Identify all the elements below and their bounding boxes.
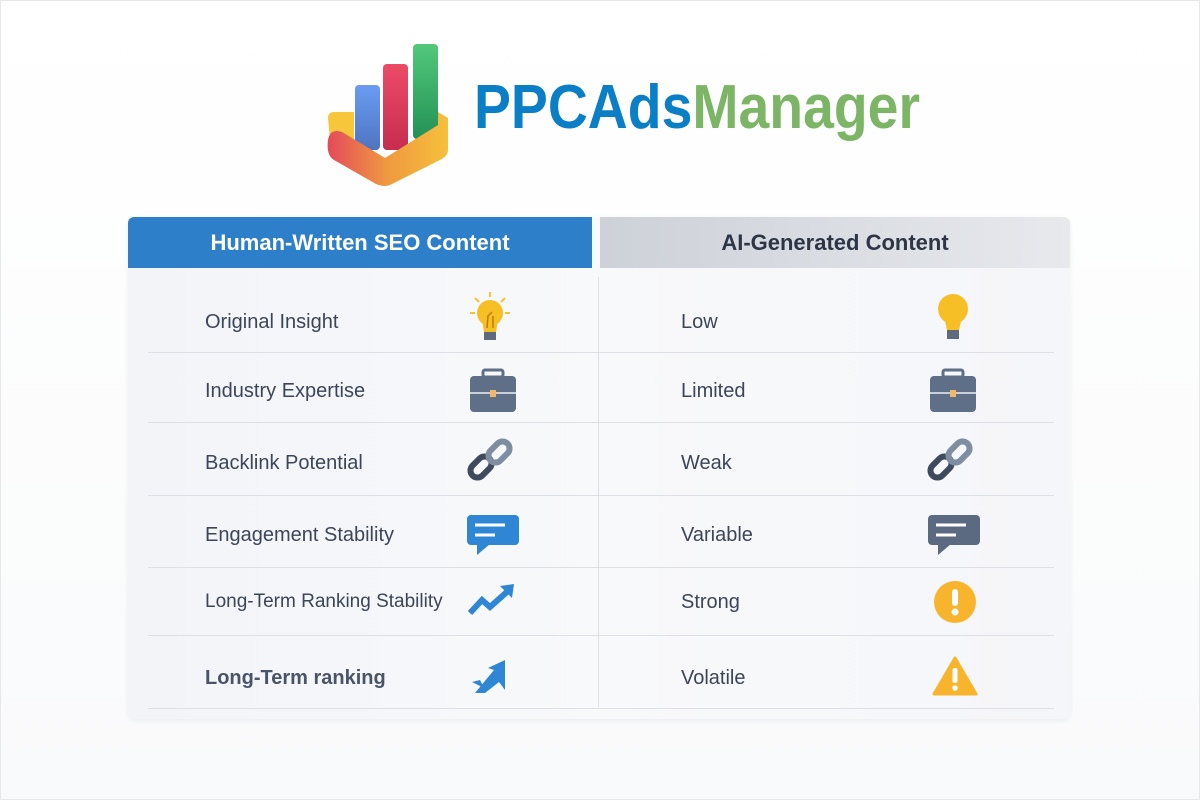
row values right: Variable	[681, 524, 753, 546]
icons right column	[928, 294, 980, 696]
row values right	[681, 311, 753, 689]
row labels left: Long-Term ranking	[205, 667, 386, 689]
row labels left: Long-Term Ranking Stability	[205, 591, 443, 612]
header: AI-generated	[600, 217, 1070, 268]
icon: up arrow	[472, 660, 505, 693]
row labels left	[205, 311, 443, 689]
row labels left: Industry Expertise	[205, 380, 365, 402]
icon: warning	[934, 658, 976, 694]
header: human-written	[128, 217, 592, 268]
table	[128, 217, 1070, 719]
icon: briefcase	[930, 370, 976, 412]
icons left column	[467, 292, 519, 693]
row values right: Limited	[681, 380, 745, 402]
row labels left: Original Insight	[205, 311, 338, 333]
icon: briefcase	[470, 370, 516, 412]
row labels left: Engagement Stability	[205, 524, 394, 546]
icon: chat	[467, 515, 519, 555]
row values right: Weak	[681, 452, 732, 474]
icon: trend arrow	[470, 584, 514, 613]
logo	[328, 44, 920, 186]
header: human-written: Human-Written SEO Content	[210, 230, 510, 255]
icon: exclamation circle	[934, 581, 976, 623]
header: AI-generated: AI-Generated Content	[721, 230, 949, 255]
icon: chat	[928, 515, 980, 555]
row values right: Strong	[681, 591, 740, 613]
row labels left: Backlink Potential	[205, 452, 363, 474]
icon: link	[468, 439, 512, 480]
row values right: Volatile	[681, 667, 746, 689]
icon: bulb	[938, 294, 968, 339]
icon: bulb	[470, 292, 510, 340]
row values right: Low	[681, 311, 718, 333]
icon: link	[928, 439, 972, 480]
